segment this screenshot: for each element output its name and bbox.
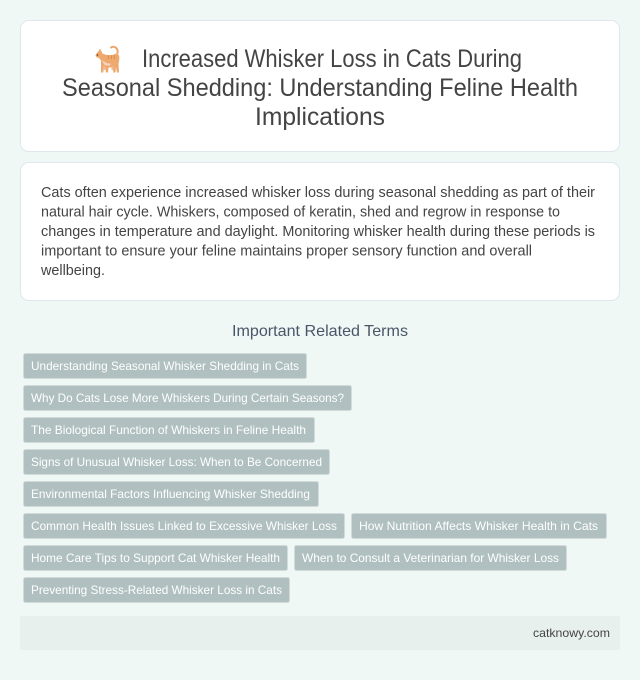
- description text: important to ensure your feline maintains proper sensory function and overall: [41, 244, 532, 260]
- title text: [62, 45, 578, 131]
- tag 4: Signs of Unusual Whisker Loss: When to Be Concerned: [31, 455, 322, 469]
- tag 6: Common Health Issues Linked to Excessive Whisker Loss: [31, 519, 337, 533]
- tag 3: The Biological Function of Whiskers in Feline Health: [31, 423, 306, 437]
- tag 7: [352, 514, 606, 538]
- description text: Cats often experience increased whisker loss during seasonal shedding as part of their: [41, 185, 595, 201]
- tag 1: Understanding Seasonal Whisker Shedding in Cats: [31, 359, 299, 373]
- tag 10: [24, 578, 290, 602]
- tag 5: [24, 482, 318, 506]
- tag 7: How Nutrition Affects Whisker Health in Cats: [359, 519, 598, 533]
- tag 8: [24, 546, 288, 570]
- tag 4: [24, 450, 330, 474]
- tag 2: [24, 386, 352, 410]
- description text: changes in temperature and daylight. Monitoring whisker health during these periods is: [41, 224, 595, 240]
- tag 6: [24, 514, 344, 538]
- footer bar: [20, 616, 620, 650]
- tag 9: When to Consult a Veterinarian for Whisker Loss: [302, 551, 559, 565]
- tag 2: Why Do Cats Lose More Whiskers During Certain Seasons?: [31, 391, 344, 405]
- tag 10: Preventing Stress-Related Whisker Loss in Cats: [31, 583, 282, 597]
- panel: title card: [20, 20, 620, 152]
- tag 8: Home Care Tips to Support Cat Whisker Health: [31, 551, 280, 565]
- description text: [40, 185, 595, 279]
- tag 5: Environmental Factors Influencing Whisker Shedding: [31, 487, 310, 501]
- tag 1: [24, 354, 306, 378]
- tag 3: [24, 418, 314, 442]
- tag 9: [294, 546, 566, 570]
- title text: Implications: [255, 103, 385, 131]
- title text: Increased Whisker Loss in Cats During: [142, 45, 522, 73]
- description text: natural hair cycle. Whiskers, composed of keratin, shed and regrow in response to: [41, 204, 560, 220]
- description text: wellbeing.: [40, 263, 105, 279]
- heading: important related terms: Important Related Terms: [232, 323, 408, 340]
- icon: cat: [96, 47, 119, 72]
- title text: Seasonal Shedding: Understanding Feline Health: [62, 74, 578, 102]
- footer bar: catknowy.com: [533, 626, 610, 640]
- panel: description card: [20, 162, 620, 300]
- tag list: [24, 354, 606, 602]
